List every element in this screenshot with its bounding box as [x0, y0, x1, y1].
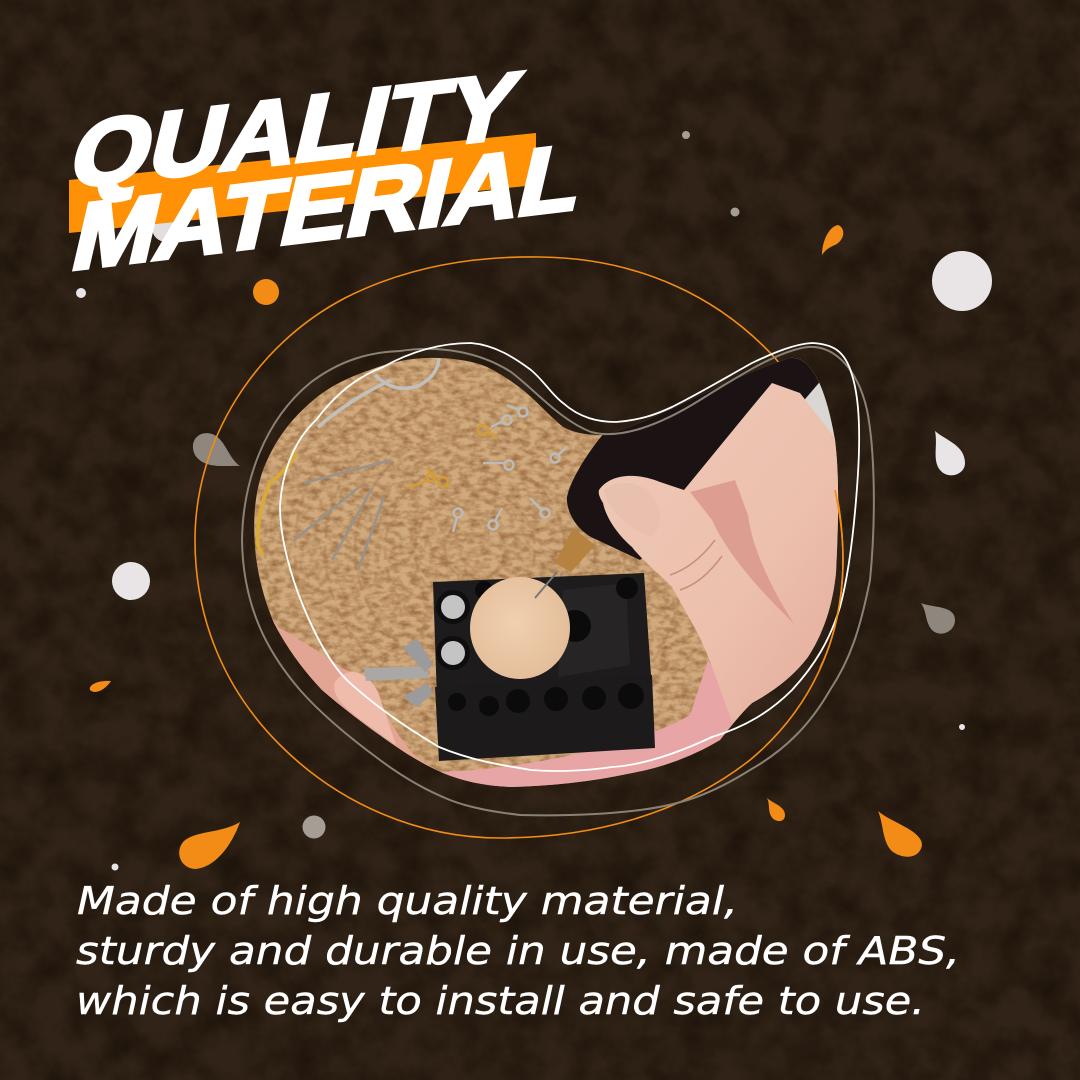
- description text: Made of high quality material,: [77, 879, 738, 923]
- photo: left thumb: [334, 672, 396, 745]
- photo: silver foil: [789, 358, 836, 441]
- product photo: drill on jute mat: [254, 358, 838, 787]
- photo: bolt: [364, 666, 429, 681]
- white outline swoosh: [280, 343, 859, 771]
- decorative leaves: [90, 225, 965, 869]
- photo: wing nut: [403, 638, 433, 707]
- orange outer ring: [195, 257, 843, 838]
- photo: brass chuck: [555, 528, 595, 572]
- photo: thumb knuckle creases: [670, 540, 722, 590]
- photo: eye pins: [407, 405, 567, 532]
- heading: orange highlight bar: [69, 133, 536, 233]
- photo: hand shadow folds: [690, 480, 795, 625]
- photo: black pen: [566, 358, 819, 560]
- decorative dots: [76, 131, 992, 870]
- heading: QUALITY MATERIAL: QUALITY: [61, 52, 530, 209]
- description text: [76, 879, 960, 1023]
- heading: QUALITY MATERIAL: [61, 52, 594, 291]
- orange ring overlap on photo edge: [820, 490, 843, 668]
- photo: pink table: [386, 660, 796, 787]
- gray outline swoosh: [242, 347, 874, 815]
- photo: nails: [293, 460, 391, 570]
- heading: QUALITY MATERIAL: MATERIAL: [63, 123, 594, 291]
- photo: wooden ball: [470, 577, 570, 679]
- description text: sturdy and durable in use, made of ABS,: [76, 929, 960, 973]
- photo: silver chain and ring: [318, 358, 439, 427]
- photo: thumbnail: [604, 483, 660, 537]
- photo: black vise: [433, 573, 655, 761]
- photo: jute mat: [254, 358, 838, 787]
- description text: which is easy to install and safe to use.: [76, 979, 925, 1023]
- photo: gold chain: [258, 453, 296, 556]
- photo: left hand: [272, 618, 422, 763]
- photo: needle: [535, 572, 557, 598]
- photo: right hand: [599, 383, 842, 722]
